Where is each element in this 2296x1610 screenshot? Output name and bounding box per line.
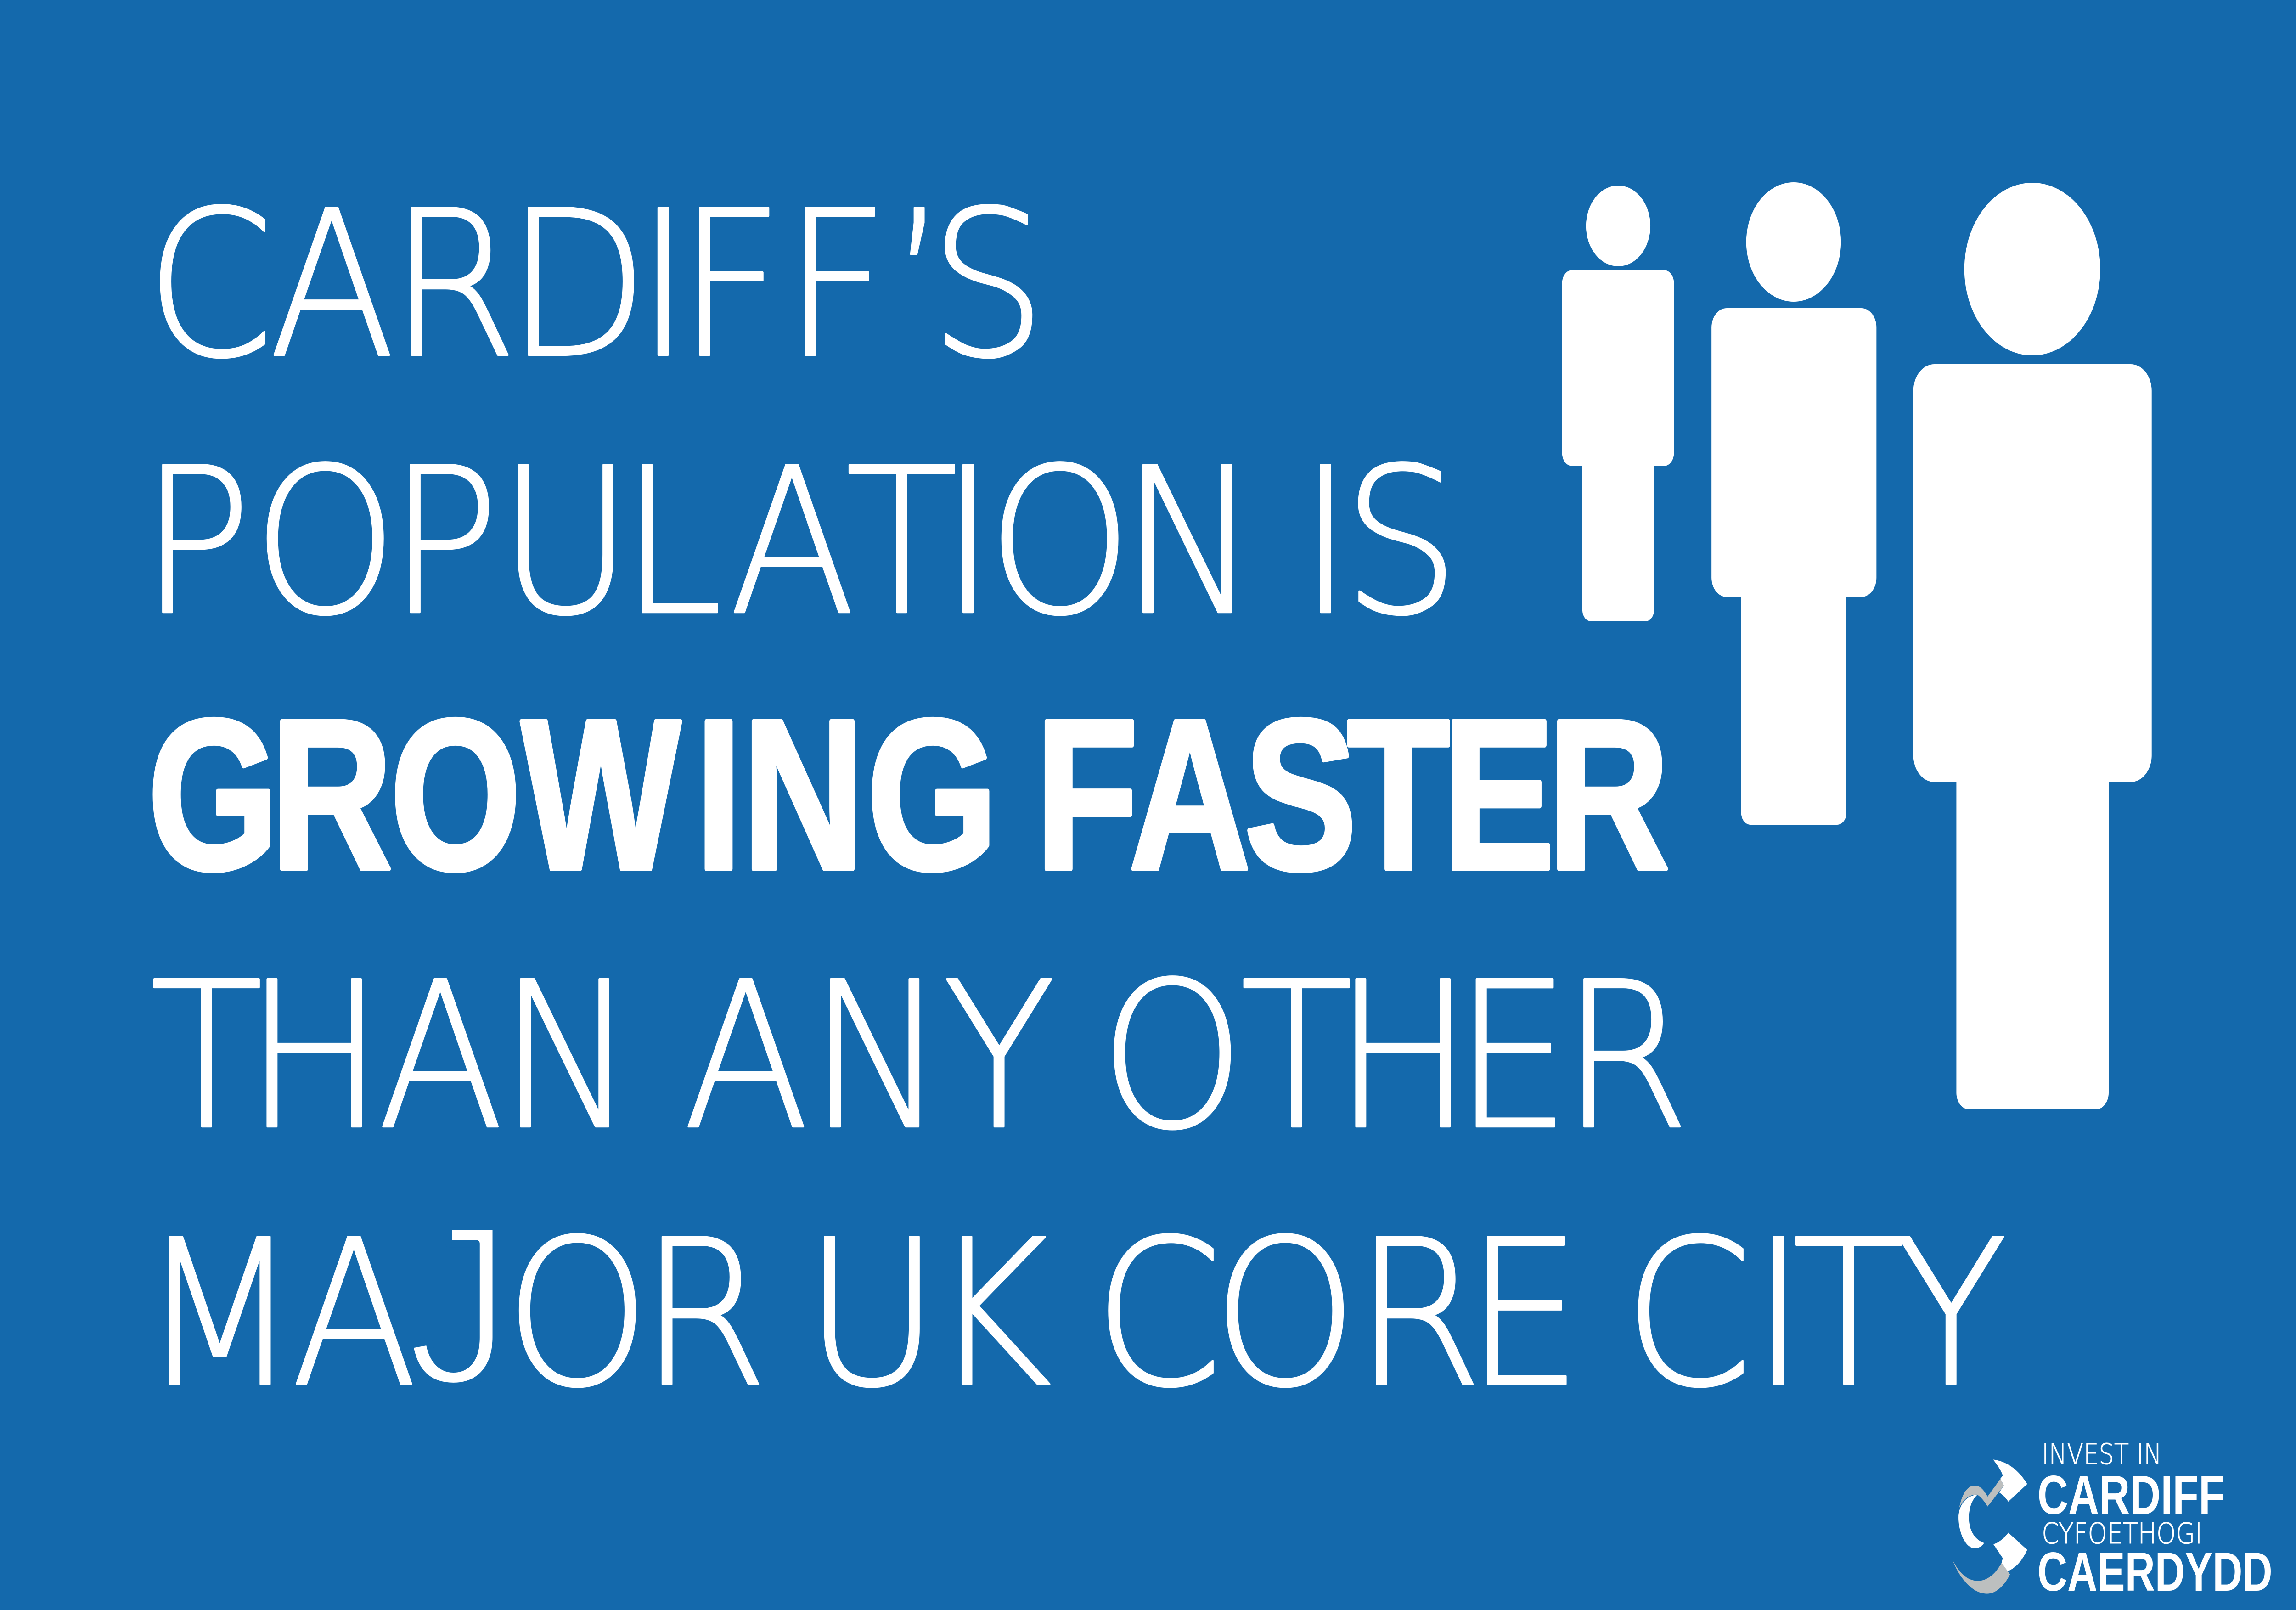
headline line 4: THAN ANY OTHER xyxy=(150,940,1690,1174)
headline line 1: CARDIFF’S xyxy=(146,168,1047,403)
headline line 3 emphasis: GROWING FASTER xyxy=(147,675,1670,915)
logo: Invest in Cardiff xyxy=(1953,1438,2273,1603)
icon: small person xyxy=(1562,186,1674,621)
headline line 2: POPULATION IS xyxy=(141,425,1460,660)
headline line 5: MAJOR UK CORE CITY xyxy=(140,1177,2008,1433)
logo text: Cardiff: CARDIFF xyxy=(2037,1464,2225,1526)
logo mark xyxy=(1953,1459,2027,1594)
icon: medium person xyxy=(1711,182,1876,825)
logo text: cyfoethogi: CYFOETHOGI xyxy=(2042,1517,2202,1551)
logo text: invest in: INVEST IN xyxy=(2042,1438,2162,1471)
icon: large person xyxy=(1913,183,2152,1109)
logo text: Caerdydd: CAERDYDD xyxy=(2037,1541,2273,1603)
headline xyxy=(140,168,2008,1433)
